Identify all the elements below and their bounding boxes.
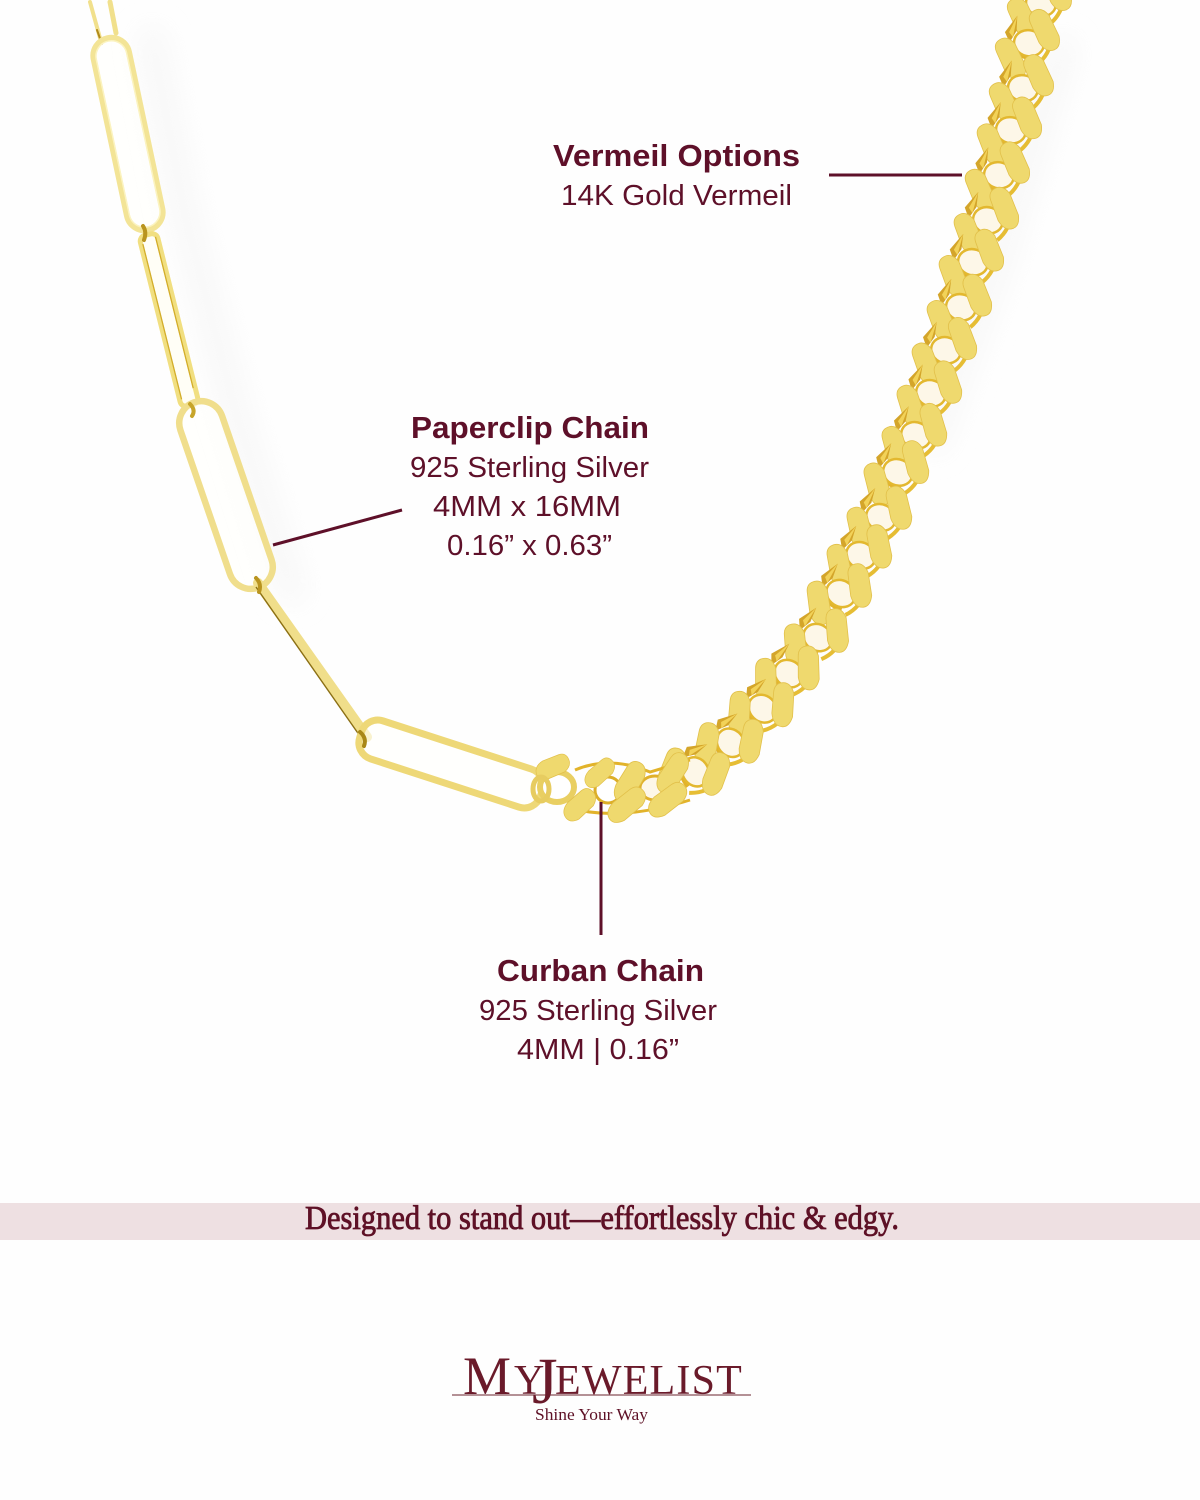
callout line: paperclip	[273, 510, 402, 545]
paperclip link 5	[354, 716, 548, 812]
logo wordmark: M	[463, 1346, 511, 1406]
text block: vermeil options: Vermeil Options	[553, 138, 800, 173]
text block: vermeil options	[553, 138, 800, 212]
text block: paperclip chain: Paperclip Chain	[411, 410, 649, 445]
text block: paperclip chain: 0.16” x 0.63”	[447, 530, 612, 562]
logo slogan: Shine Your Way	[535, 1405, 649, 1424]
paperclip link stub at top	[90, 2, 116, 44]
text block: paperclip chain: 925 Sterling Silver	[410, 452, 649, 484]
text block: curban chain: 925 Sterling Silver	[479, 995, 717, 1027]
tagline: Designed to stand out—effortlessly chic & edgy.	[305, 1200, 899, 1237]
text block: curban chain: 4MM | 0.16”	[517, 1034, 679, 1066]
text block: paperclip chain	[410, 410, 649, 562]
paperclip link 1	[90, 34, 166, 234]
callout line: vermeil	[829, 174, 962, 176]
callout line: curban	[600, 802, 602, 935]
logo	[452, 1345, 751, 1424]
logo wordmark: J	[532, 1345, 558, 1418]
paperclip chain	[90, 2, 548, 812]
link junctions	[143, 226, 365, 746]
text block: curban chain: Curban Chain	[497, 953, 704, 988]
logo wordmark: Y	[514, 1358, 544, 1404]
soft chain shadow	[150, 30, 1065, 600]
paperclip link 2	[139, 232, 199, 408]
tagline band	[0, 1203, 1200, 1240]
logo underline	[452, 1394, 751, 1396]
text block: curban chain	[479, 953, 717, 1066]
curb chain	[533, 0, 1083, 826]
text block: vermeil options: 14K Gold Vermeil	[561, 180, 792, 212]
clasp-end links	[533, 749, 696, 826]
logo wordmark: EWELIST	[555, 1358, 743, 1404]
paperclip link 4	[256, 583, 367, 739]
text block: paperclip chain: 4MM x 16MM	[433, 491, 621, 523]
paperclip link 3	[173, 395, 279, 595]
